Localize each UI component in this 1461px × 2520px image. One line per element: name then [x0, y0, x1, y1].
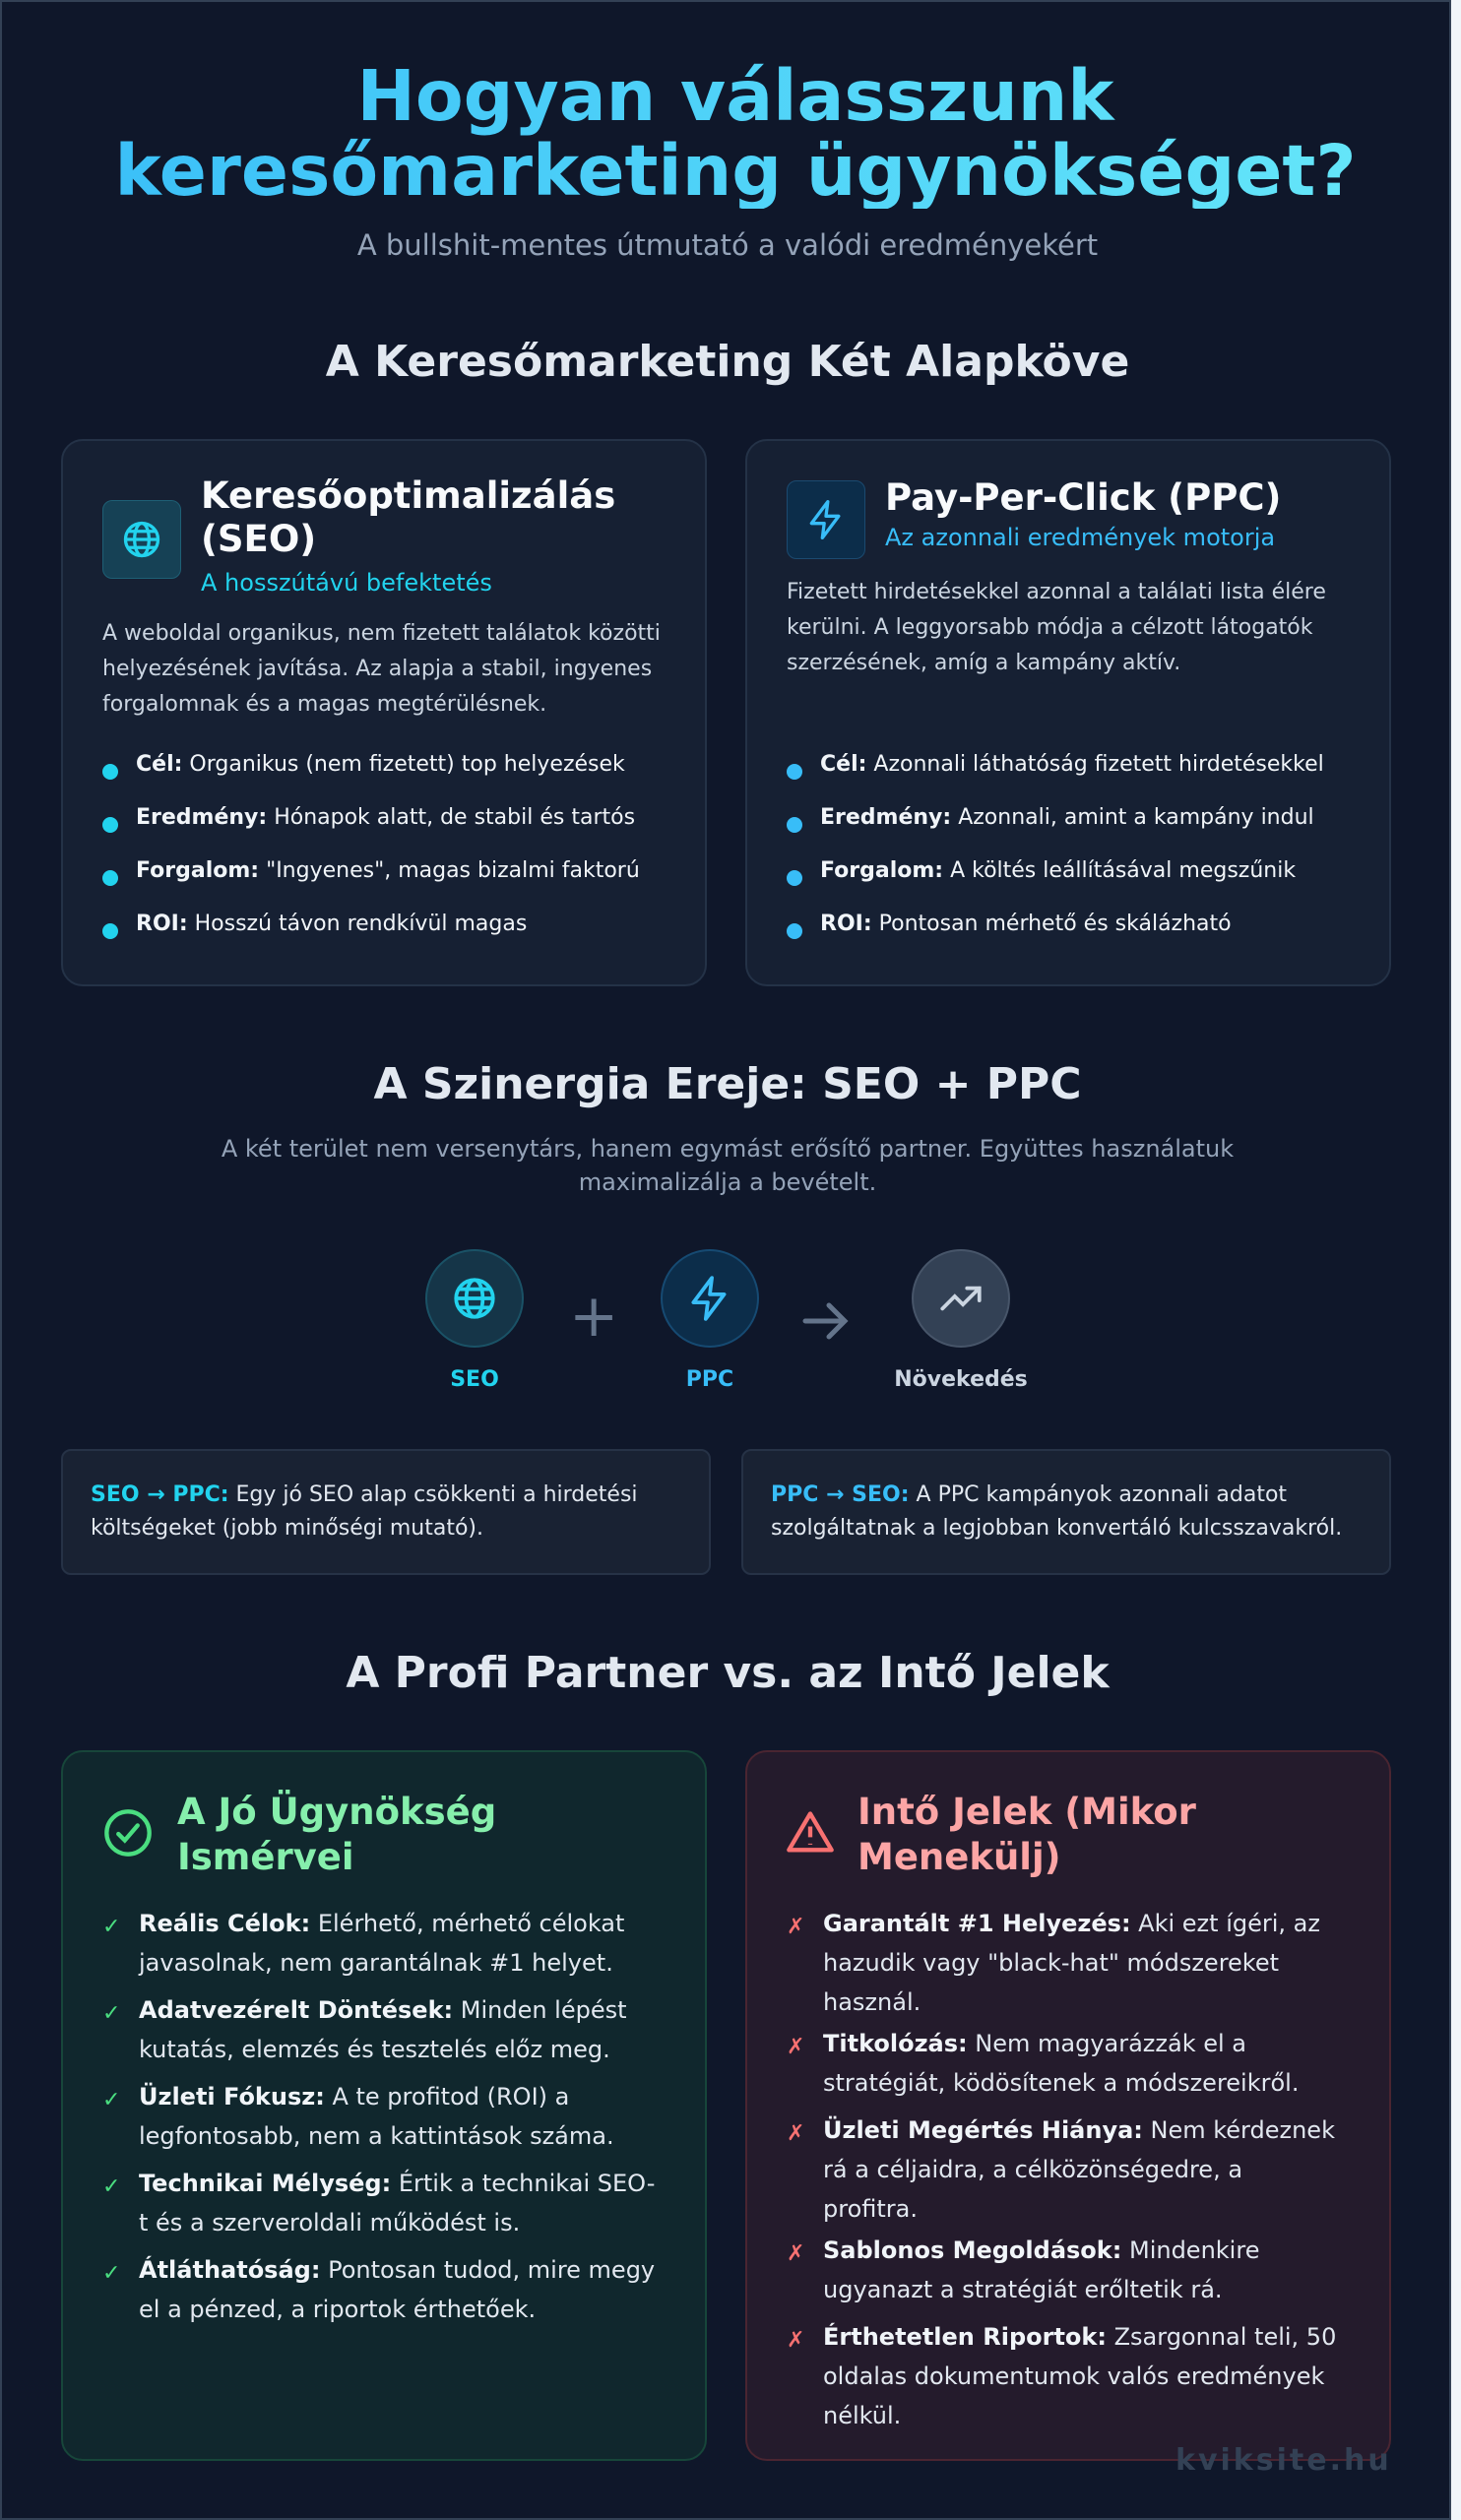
diagram: SEO + PPC -> growth: PPC [686, 1367, 733, 1392]
heading: two pillars: A Keresőmarketing Két Alapköve [326, 337, 1129, 387]
warning list: Titkolózás: Nem magyarázzák el a stratégiát, ködösítenek a módszereikről. [823, 2030, 1299, 2097]
panel: SEO: Cél: Organikus (nem fizetett) top helyezések [136, 752, 625, 777]
panel: warning signs [745, 1750, 1391, 2461]
SEO bullets [102, 752, 640, 939]
callout: PPC to SEO [741, 1449, 1391, 1575]
heading: synergy: A Szinergia Ereje: SEO + PPC [373, 1059, 1082, 1109]
arrow [803, 1303, 849, 1339]
warning list: Üzleti Megértés Hiánya: Nem kérdeznek rá a céljaidra, a célközönségedre, a [823, 2116, 1335, 2183]
icon: growth circle [912, 1249, 1010, 1348]
heading: partner vs warning: A Profi Partner vs. az Intő Jelek [346, 1648, 1110, 1698]
SEO title [201, 474, 615, 560]
callout: SEO to PPC [61, 1449, 711, 1575]
warning heading [858, 1791, 1196, 1878]
good list: ✓ [102, 2001, 120, 2026]
good list: ✓ [102, 2088, 120, 2112]
panel: SEO: Forgalom: "Ingyenes", magas bizalmi faktorú [136, 858, 640, 883]
panel: PPC: Eredmény: Azonnali, amint a kampány indul [820, 805, 1314, 830]
good list: Reális Célok: Elérhető, mérhető célokat javasolnak, nem garantálnak #1 helyet. [139, 1910, 624, 1977]
SEO description: A weboldal organikus, nem fizetett találatok közötti helyezésének javítása. Az alapja a stabil, ingyenes forgalomnak és a magas megtérülésnek. [102, 621, 661, 717]
PPC subtitle: Az azonnali eredmények motorja [885, 524, 1275, 551]
good heading [177, 1790, 496, 1878]
good list: Adatvezérelt Döntések: Minden lépést kutatás, elemzés és tesztelés előz meg. [139, 1996, 627, 2063]
labels: SEO [450, 1367, 499, 1392]
panel: SEO [61, 439, 707, 986]
title [2, 59, 1453, 209]
panel: SEO: Eredmény: Hónapok alatt, de stabil és tartós [136, 805, 635, 830]
good heading: Ismérvei [177, 1836, 354, 1878]
good list [102, 1910, 655, 2323]
warning list [787, 1910, 1336, 2429]
icon: PPC circle [661, 1249, 759, 1348]
plus: + [569, 1282, 618, 1351]
callout: SEO to PPC: SEO → PPC: Egy jó SEO alap csökkenti a hirdetési költségeket (jobb minőségi mutató). [91, 1482, 638, 1541]
warning list: ✗ [787, 1915, 804, 1939]
subtitle: A bullshit-mentes útmutató a valódi eredményekért [357, 228, 1098, 262]
PPC description: Fizetett hirdetésekkel azonnal a találati lista élére kerülni. A leggyorsabb módja a célzott látogatók szerzésének, amíg a kampány aktív. [787, 580, 1326, 675]
warning heading: Intő Jelek (Mikor [858, 1791, 1196, 1833]
warning list: Sablonos Megoldások: Mindenkire ugyanazt a stratégiát erőltetik rá. [823, 2236, 1259, 2303]
icon: check circle [104, 1809, 152, 1857]
good list: ✓ [102, 2174, 120, 2199]
panel: PPC: Forgalom: A költés leállításával megszűnik [820, 858, 1296, 883]
good list: Átláthatóság: Pontosan tudod, mire megy el a pénzed, a riportok érthetőek. [139, 2256, 655, 2323]
SEO title: Keresőoptimalizálás [201, 474, 615, 517]
icon: warning triangle [787, 1811, 834, 1853]
good list: ✓ [102, 1915, 120, 1939]
panel: PPC [745, 439, 1391, 986]
warning list: ✗ [787, 2241, 804, 2266]
icon: globe [102, 500, 181, 579]
icon: SEO circle [425, 1249, 524, 1348]
good list: Technikai Mélység: Értik a technikai SEO-t és a szerveroldali működést is. [139, 2170, 655, 2236]
SEO subtitle: A hosszútávú befektetés [201, 569, 492, 597]
panel: PPC: Cél: Azonnali láthatóság fizetett hirdetésekkel [820, 752, 1324, 777]
synergy subtitle: A két terület nem versenytárs, hanem egymást erősítő partner. Együttes használatuk maximalizálja a bevételt. [222, 1135, 1234, 1196]
warning list: ✗ [787, 2035, 804, 2059]
warning list: ✗ [787, 2121, 804, 2146]
callout: PPC to SEO: PPC → SEO: A PPC kampányok azonnali adatot szolgáltatnak a legjobban konvertáló kulcsszavakról. [771, 1482, 1342, 1541]
title: Hogyan válasszunk [356, 55, 1114, 137]
watermark: kviksite.hu [1175, 2443, 1392, 2478]
diagram: SEO + PPC -> growth: Növekedés [894, 1367, 1028, 1392]
SEO title: (SEO) [201, 518, 316, 560]
panel: good agency [61, 1750, 707, 2461]
good heading: A Jó Ügynökség [177, 1791, 496, 1833]
warning list: Érthetetlen Riportok: Zsargonnal teli, 50 oldalas dokumentumok valós eredmények nélkül. [823, 2323, 1336, 2429]
diagram: SEO + PPC -> growth [425, 1249, 1028, 1392]
panel: PPC: ROI: Pontosan mérhető és skálázható [820, 912, 1232, 936]
good list: Üzleti Fókusz: A te profitod (ROI) a legfontosabb, nem a kattintások száma. [139, 2083, 614, 2150]
warning list: profitra. [823, 2195, 918, 2223]
good list: ✓ [102, 2261, 120, 2286]
title: keresőmarketing ügynökséget? [114, 130, 1357, 212]
warning list: ✗ [787, 2328, 804, 2353]
icon: lightning [787, 480, 865, 559]
warning list: Garantált #1 Helyezés: Aki ezt ígéri, az hazudik vagy "black-hat" módszereket használ. [823, 1910, 1320, 2016]
PPC title: Pay-Per-Click (PPC) [885, 476, 1281, 519]
panel: SEO: ROI: Hosszú távon rendkívül magas [136, 912, 527, 936]
warning heading: Menekülj) [858, 1836, 1061, 1878]
PPC bullets [787, 752, 1324, 939]
